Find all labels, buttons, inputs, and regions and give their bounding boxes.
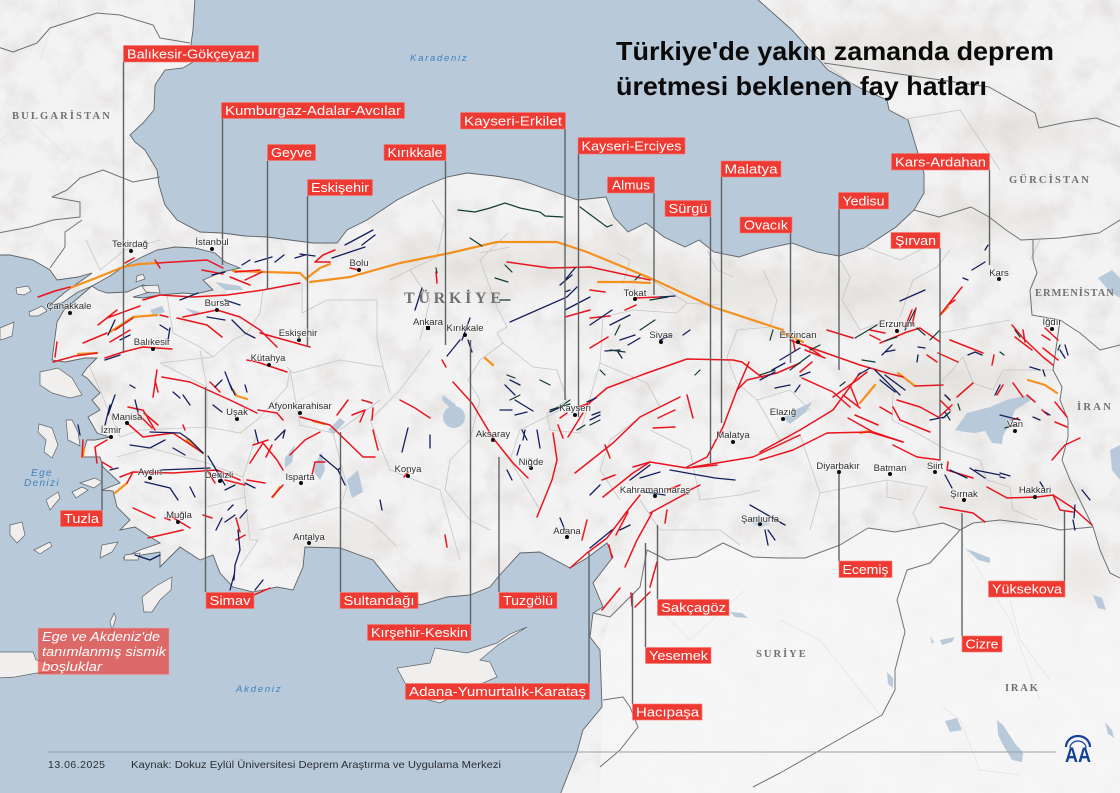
label: Sürgü: Sürgü <box>668 202 708 216</box>
label: Yedisu: Yedisu <box>842 194 885 208</box>
city markers: Afyonkarahisar <box>268 401 332 412</box>
footer rule <box>48 751 1056 753</box>
label: Adana-Yumurtalık-Karataş <box>406 552 590 700</box>
city markers <box>47 237 1062 545</box>
province borders <box>86 60 1053 567</box>
city markers: Kars <box>989 268 1009 279</box>
label: Eskişehir: Eskişehir <box>311 181 369 195</box>
label: Yesemek: Yesemek <box>649 649 709 663</box>
sea: Black Sea <box>130 0 924 257</box>
city markers: Van <box>1007 419 1023 430</box>
label: Simav: Simav <box>210 594 251 608</box>
label: Kayseri-Erciyes <box>578 138 685 417</box>
city markers: Muğla <box>166 510 193 521</box>
sea labels: Denizi <box>24 478 60 489</box>
city markers: Erzurum <box>879 319 915 330</box>
callout: seismic gaps: Ege ve Akdeniz'de <box>42 630 160 644</box>
label: Kumburgaz-Adalar-Avcılar: Kumburgaz-Adalar-Avcılar <box>225 104 401 118</box>
label: Simav <box>206 387 254 608</box>
terrain shading <box>280 25 1115 603</box>
fault lines: dark green <box>436 203 1060 430</box>
sea labels: Akdeniz <box>235 684 282 695</box>
sea labels: Ege <box>31 468 53 479</box>
label: Kars-Ardahan <box>892 154 990 265</box>
label: Balıkesir-Gökçeyazı <box>124 46 258 353</box>
label: Sürgü <box>665 200 711 463</box>
label: Geyve: Geyve <box>271 146 312 160</box>
label: Almus: Almus <box>612 178 650 192</box>
city markers: Iğdır <box>1042 317 1062 328</box>
label: Eskişehir <box>308 180 372 347</box>
country labels: IRAK <box>1005 683 1039 694</box>
label: Kırıkkale: Kırıkkale <box>388 146 443 160</box>
city markers: Batman <box>874 463 906 474</box>
source: Kaynak: Dokuz Eylül Üniversitesi Deprem Araştırma ve Uygulama Merkezi <box>131 759 501 771</box>
label: Hacıpaşa: Hacıpaşa <box>636 706 699 720</box>
callout: seismic gaps <box>38 628 169 674</box>
title: üretmesi beklenen fay hatları <box>616 71 987 101</box>
country labels: İRAN <box>1077 401 1112 413</box>
city markers: Elazığ <box>770 407 796 418</box>
country labels: BULGARİSTAN <box>12 110 111 122</box>
city markers: Erzincan <box>780 330 816 341</box>
label: Balıkesir-Gökçeyazı: Balıkesir-Gökçeyazı <box>127 48 255 62</box>
label: Almus <box>608 177 654 295</box>
country labels: ERMENİSTAN <box>1035 287 1115 299</box>
label: Kırıkkale <box>384 144 446 345</box>
label: Kayseri-Erciyes: Kayseri-Erciyes <box>582 140 682 154</box>
city markers: Bursa <box>205 298 230 309</box>
country labels: TÜRKİYE <box>404 288 503 307</box>
country labels <box>12 110 1115 694</box>
label: Kayseri-Erkilet: Kayseri-Erkilet <box>464 114 563 128</box>
city markers: Eskişehir <box>279 328 317 339</box>
islands <box>0 274 527 703</box>
label: Malatya: Malatya <box>724 162 778 176</box>
city markers: Konya <box>395 464 422 475</box>
label: Tuzla: Tuzla <box>64 512 99 526</box>
city markers: Ankara <box>413 317 444 328</box>
label: Sakçagöz <box>658 525 729 616</box>
label: Sultandağı: Sultandağı <box>344 594 414 608</box>
city markers: Sivas <box>649 330 673 341</box>
label: Kumburgaz-Adalar-Avcılar <box>222 102 404 265</box>
callout: seismic gaps: tanımlanmış sismik <box>42 645 167 659</box>
country labels: SURİYE <box>756 648 807 660</box>
city markers: Aksaray <box>476 429 510 440</box>
city markers: Antalya <box>293 532 326 543</box>
city markers: Tokat <box>624 288 647 299</box>
date: 13.06.2025 <box>48 759 105 771</box>
icon: AA logo <box>1065 736 1091 767</box>
city markers: Siirt <box>927 461 944 472</box>
label: Ovacık: Ovacık <box>744 218 789 232</box>
country labels: GÜRCİSTAN <box>1009 173 1090 186</box>
sea: Aegean and Mediterranean <box>0 255 613 793</box>
label: Hacıpaşa <box>632 593 702 720</box>
label: Ovacık <box>740 217 792 363</box>
label: Kayseri-Erkilet <box>460 112 566 400</box>
label: Ecemiş <box>839 472 892 578</box>
label: Adana-Yumurtalık-Karataş: Adana-Yumurtalık-Karataş <box>409 685 586 699</box>
label: Şırvan: Şırvan <box>895 234 936 248</box>
city markers: Niğde <box>519 457 543 468</box>
city markers: Adana <box>553 526 581 537</box>
label: Sakçagöz: Sakçagöz <box>661 601 726 615</box>
icon: AA logo: AA <box>1065 744 1091 767</box>
label: Tuzla <box>60 463 102 526</box>
fault lines: navy and dark <box>78 230 1090 590</box>
lowlands: Syria and Iraq <box>600 523 1120 793</box>
label: Kırşehir-Keskin: Kırşehir-Keskin <box>371 626 468 640</box>
city markers: Şanlıurfa <box>741 514 780 525</box>
label: Ecemiş: Ecemiş <box>842 563 888 577</box>
label: Malatya <box>721 161 781 423</box>
label: Yüksekova <box>988 510 1065 597</box>
title: Türkiye'de yakın zamanda deprem <box>616 36 1054 66</box>
fault lines: orange <box>70 242 1057 497</box>
label: Kırşehir-Keskin <box>368 340 471 640</box>
label: Sultandağı <box>340 432 418 608</box>
city markers: Kütahya <box>251 353 286 364</box>
city markers: Kırıkkale <box>447 323 483 334</box>
city markers: Şırnak <box>950 489 978 500</box>
label: Yüksekova: Yüksekova <box>992 582 1062 596</box>
city markers: Diyarbakır <box>816 461 860 472</box>
lakes <box>150 270 1120 762</box>
city markers: Hakkari <box>1019 485 1051 496</box>
label: Geyve <box>268 144 316 290</box>
label: Yedisu <box>838 192 888 370</box>
city markers: Manisa <box>112 412 143 423</box>
city markers: Denizli <box>205 470 233 481</box>
label: Cizre <box>962 513 1002 652</box>
label: Kars-Ardahan: Kars-Ardahan <box>895 156 986 170</box>
label: Yesemek <box>646 543 711 664</box>
label: Tuzgölü: Tuzgölü <box>503 594 553 608</box>
label: Şırvan <box>891 232 940 460</box>
city markers: Isparta <box>285 472 315 483</box>
city markers: Kahramanmaraş <box>620 485 690 496</box>
callout: seismic gaps: boşluklar <box>42 660 103 674</box>
city markers: Çanakkale <box>47 301 91 312</box>
city markers: Uşak <box>226 407 248 418</box>
city markers: Bolu <box>349 258 369 269</box>
city markers: Tekirdağ <box>112 239 148 250</box>
city markers: İstanbul <box>195 237 229 248</box>
city markers: Malatya <box>716 430 750 441</box>
label: Tuzgölü <box>499 457 557 608</box>
label: Cizre: Cizre <box>966 638 999 652</box>
sea: Marmara <box>92 247 240 298</box>
city markers: Aydın <box>138 467 162 478</box>
city markers: İzmir <box>101 425 121 436</box>
city markers: Balıkesir <box>134 337 170 348</box>
sea labels <box>24 53 468 695</box>
sea labels: Karadeniz <box>410 53 468 64</box>
city markers: Kayseri <box>559 403 591 414</box>
fault lines: red <box>38 250 1092 610</box>
